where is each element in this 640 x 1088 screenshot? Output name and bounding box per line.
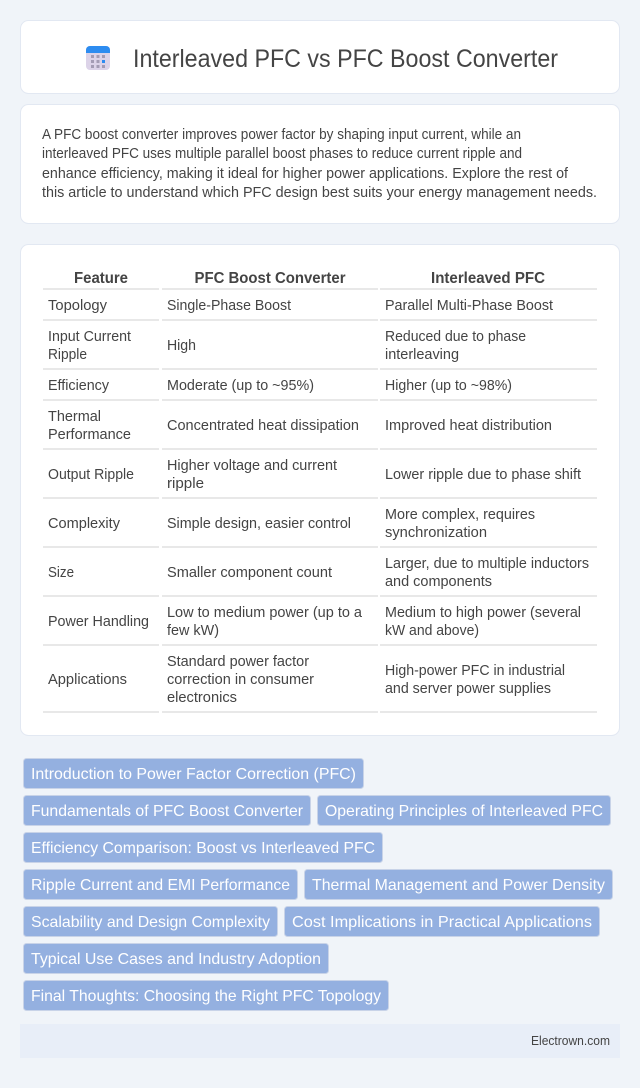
row: complexity: synchronization	[385, 525, 487, 541]
row: topology: Single-Phase Boost	[167, 298, 291, 314]
row: size: Smaller component count	[167, 565, 332, 581]
panel: introduction: enhance efficiency, making it ideal for higher power applications. Explore the rest of	[42, 166, 569, 182]
row: topology	[48, 298, 553, 314]
row: power handling: Medium to high power (several	[385, 605, 581, 621]
row: applications: correction in consumer	[167, 672, 314, 688]
tag: Scalability and Design Complexity	[31, 914, 270, 931]
row: applications: High-power PFC in industrial	[385, 663, 565, 679]
tag: Introduction to Power Factor Correction (PFC)	[31, 766, 356, 783]
row: complexity: Simple design, easier control	[167, 516, 351, 532]
row: input current ripple: Ripple	[48, 347, 87, 363]
tag: Final Thoughts: Choosing the Right PFC Topology	[31, 988, 381, 1005]
row: power handling	[48, 605, 581, 639]
row: applications: electronics	[167, 690, 237, 706]
table header: Interleaved PFC	[431, 270, 545, 287]
panel: introduction	[20, 104, 620, 224]
table header: Feature	[74, 270, 128, 287]
panel: introduction: this article to understand which PFC design best suits your energy management needs.	[42, 185, 597, 201]
row: output ripple: Output Ripple	[48, 467, 134, 483]
tag: Typical Use Cases and Industry Adoption	[31, 951, 321, 968]
row: size: Size	[48, 565, 74, 581]
row: thermal performance: Thermal	[48, 409, 101, 425]
row: input current ripple: Input Current	[48, 329, 131, 345]
tag	[304, 870, 612, 900]
panel: introduction: A PFC boost converter improves power factor by shaping input current, while an	[42, 127, 521, 143]
row: efficiency: Efficiency	[48, 378, 110, 394]
row: complexity: Complexity	[48, 516, 121, 532]
footer: Electrown.com	[531, 1034, 610, 1048]
row: power handling: Low to medium power (up to a	[167, 605, 362, 621]
row: thermal performance	[48, 409, 552, 443]
row: input current ripple: High	[167, 338, 196, 354]
tag: Ripple Current and EMI Performance	[31, 877, 290, 894]
table header: PFC Boost Converter	[194, 270, 346, 287]
row: applications: and server power supplies	[385, 681, 551, 697]
tag	[24, 758, 364, 788]
row: applications	[48, 654, 565, 706]
heading: Interleaved PFC vs PFC Boost Converter	[133, 45, 558, 73]
row: efficiency: Moderate (up to ~95%)	[167, 378, 314, 394]
row: complexity	[48, 507, 535, 541]
topic tags	[24, 758, 612, 1010]
tag: Cost Implications in Practical Applications	[292, 914, 592, 931]
panel: comparison table	[20, 244, 620, 736]
panel: title	[20, 20, 620, 94]
tag	[24, 796, 310, 826]
row: power handling: Power Handling	[48, 614, 149, 630]
row: applications: Applications	[48, 672, 127, 688]
row: efficiency: Higher (up to ~98%)	[385, 378, 512, 394]
table header	[74, 270, 545, 287]
tag: Fundamentals of PFC Boost Converter	[31, 803, 304, 820]
tag: Operating Principles of Interleaved PFC	[325, 803, 603, 820]
row: size: Larger, due to multiple inductors	[385, 556, 589, 572]
row: power handling: few kW)	[167, 623, 219, 639]
tag: Efficiency Comparison: Boost vs Interleaved PFC	[31, 840, 375, 857]
tag	[318, 796, 610, 826]
row: topology: Parallel Multi-Phase Boost	[385, 298, 553, 314]
footer	[20, 1024, 620, 1058]
tag	[24, 980, 388, 1010]
tag	[24, 944, 328, 974]
tag	[24, 870, 298, 900]
row: size	[48, 556, 589, 590]
tag: Thermal Management and Power Density	[312, 877, 605, 894]
row: input current ripple: interleaving	[385, 347, 459, 363]
tag	[284, 906, 600, 936]
row: power handling: kW and above)	[385, 623, 479, 639]
row: input current ripple: Reduced due to phase	[385, 329, 526, 345]
row: size: and components	[385, 574, 492, 590]
row: applications: Standard power factor	[167, 654, 309, 670]
panel: introduction: interleaved PFC uses multiple parallel boost phases to reduce current ripple and	[42, 146, 522, 162]
row: thermal performance: Performance	[48, 427, 131, 443]
row: input current ripple	[48, 329, 526, 363]
row: output ripple	[48, 458, 581, 492]
row: efficiency	[48, 378, 512, 394]
row: thermal performance: Concentrated heat dissipation	[167, 418, 359, 434]
row: complexity: More complex, requires	[385, 507, 535, 523]
row: output ripple: ripple	[167, 476, 204, 492]
row: topology: Topology	[48, 298, 108, 314]
row: output ripple: Higher voltage and current	[167, 458, 337, 474]
tag	[24, 906, 278, 936]
row: thermal performance: Improved heat distribution	[385, 418, 552, 434]
tag	[24, 832, 382, 862]
row: output ripple: Lower ripple due to phase shift	[385, 467, 581, 483]
icon: calendar	[86, 46, 110, 70]
